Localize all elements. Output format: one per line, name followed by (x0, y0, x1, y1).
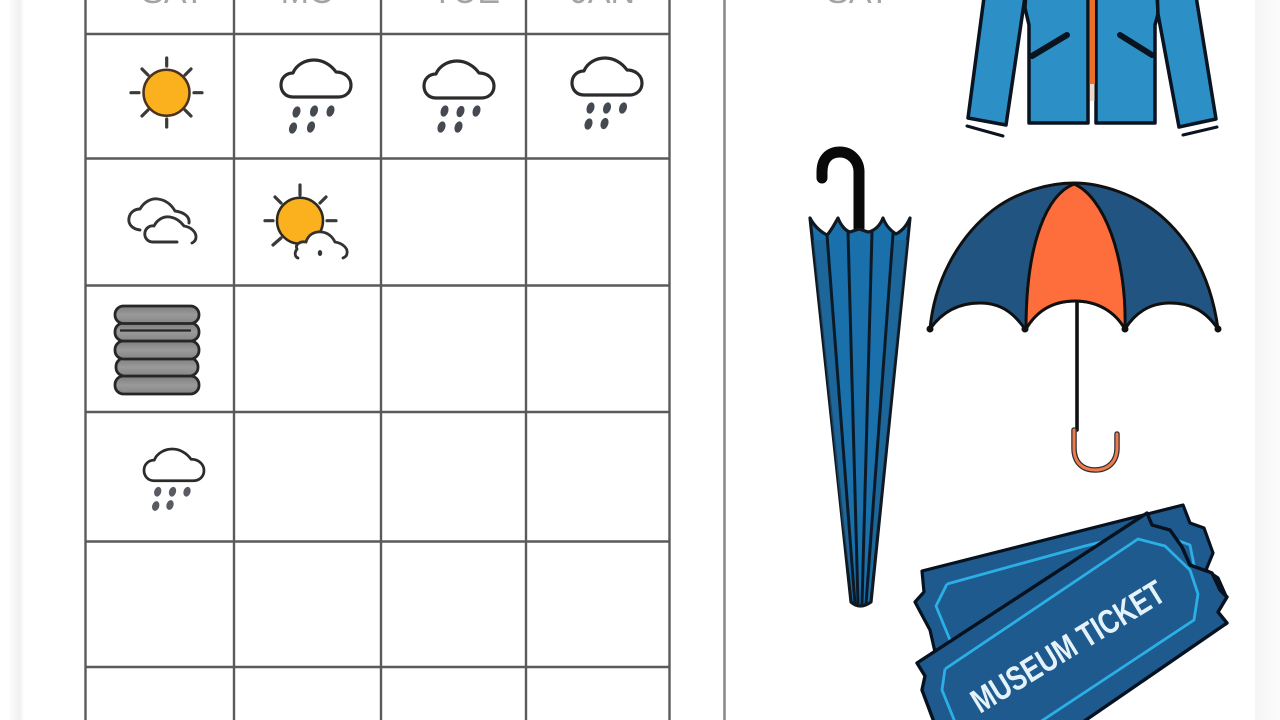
page edge shadow right (1255, 0, 1280, 720)
column headings, cut off at top (141, 0, 890, 11)
icon: sun behind cloud (265, 185, 347, 258)
back ticket (915, 505, 1226, 700)
front ticket (917, 513, 1227, 720)
icon: sun (131, 58, 202, 127)
section divider (723, 0, 726, 720)
page edge shadow left (10, 0, 24, 720)
icon: closed umbrella (810, 152, 910, 606)
icon: stacked layers (115, 306, 199, 394)
icon: rain cloud Monday (281, 60, 351, 135)
icon: rain cloud Tuesday (424, 61, 494, 134)
icon: museum tickets (915, 505, 1227, 720)
icon: rain cloud Wednesday (572, 58, 642, 131)
icon: small rain cloud (144, 449, 204, 512)
icon: overlapping clouds (129, 199, 196, 243)
icon: jacket (967, 0, 1217, 136)
ticket label: MUSEUM TICKET (964, 573, 1172, 720)
icon: open umbrella (926, 183, 1222, 470)
weather table grid (85, 0, 670, 720)
